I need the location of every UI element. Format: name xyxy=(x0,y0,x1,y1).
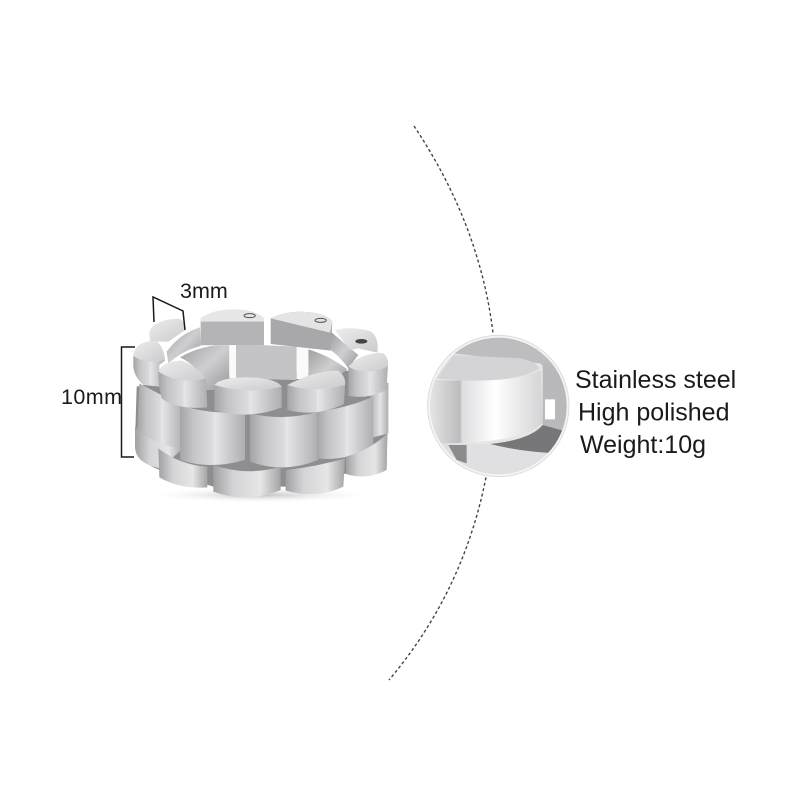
lens border xyxy=(428,335,569,477)
label: 3mm: 3mm xyxy=(180,279,228,303)
finish: High polished xyxy=(578,398,730,426)
infographic canvas xyxy=(62,126,734,680)
spec text block xyxy=(575,366,736,459)
front top row links xyxy=(133,341,388,415)
material: Stainless steel xyxy=(575,366,736,394)
dimension bracket: 10mm xyxy=(122,347,135,457)
dimension bracket: 3mm xyxy=(153,297,185,330)
dashed arc lower xyxy=(389,472,487,680)
lens contents xyxy=(430,338,567,474)
ring body backing xyxy=(135,370,388,487)
inner back plates xyxy=(167,327,358,390)
dashed arc upper xyxy=(414,126,493,333)
middle row links xyxy=(137,383,388,467)
ground shadow xyxy=(143,487,377,503)
magnified detail circle xyxy=(427,333,570,480)
weight: Weight:10g xyxy=(580,431,706,459)
back links xyxy=(149,309,378,353)
label: 10mm: 10mm xyxy=(61,385,122,409)
ring product image xyxy=(133,309,388,503)
bottom row links xyxy=(135,427,387,497)
